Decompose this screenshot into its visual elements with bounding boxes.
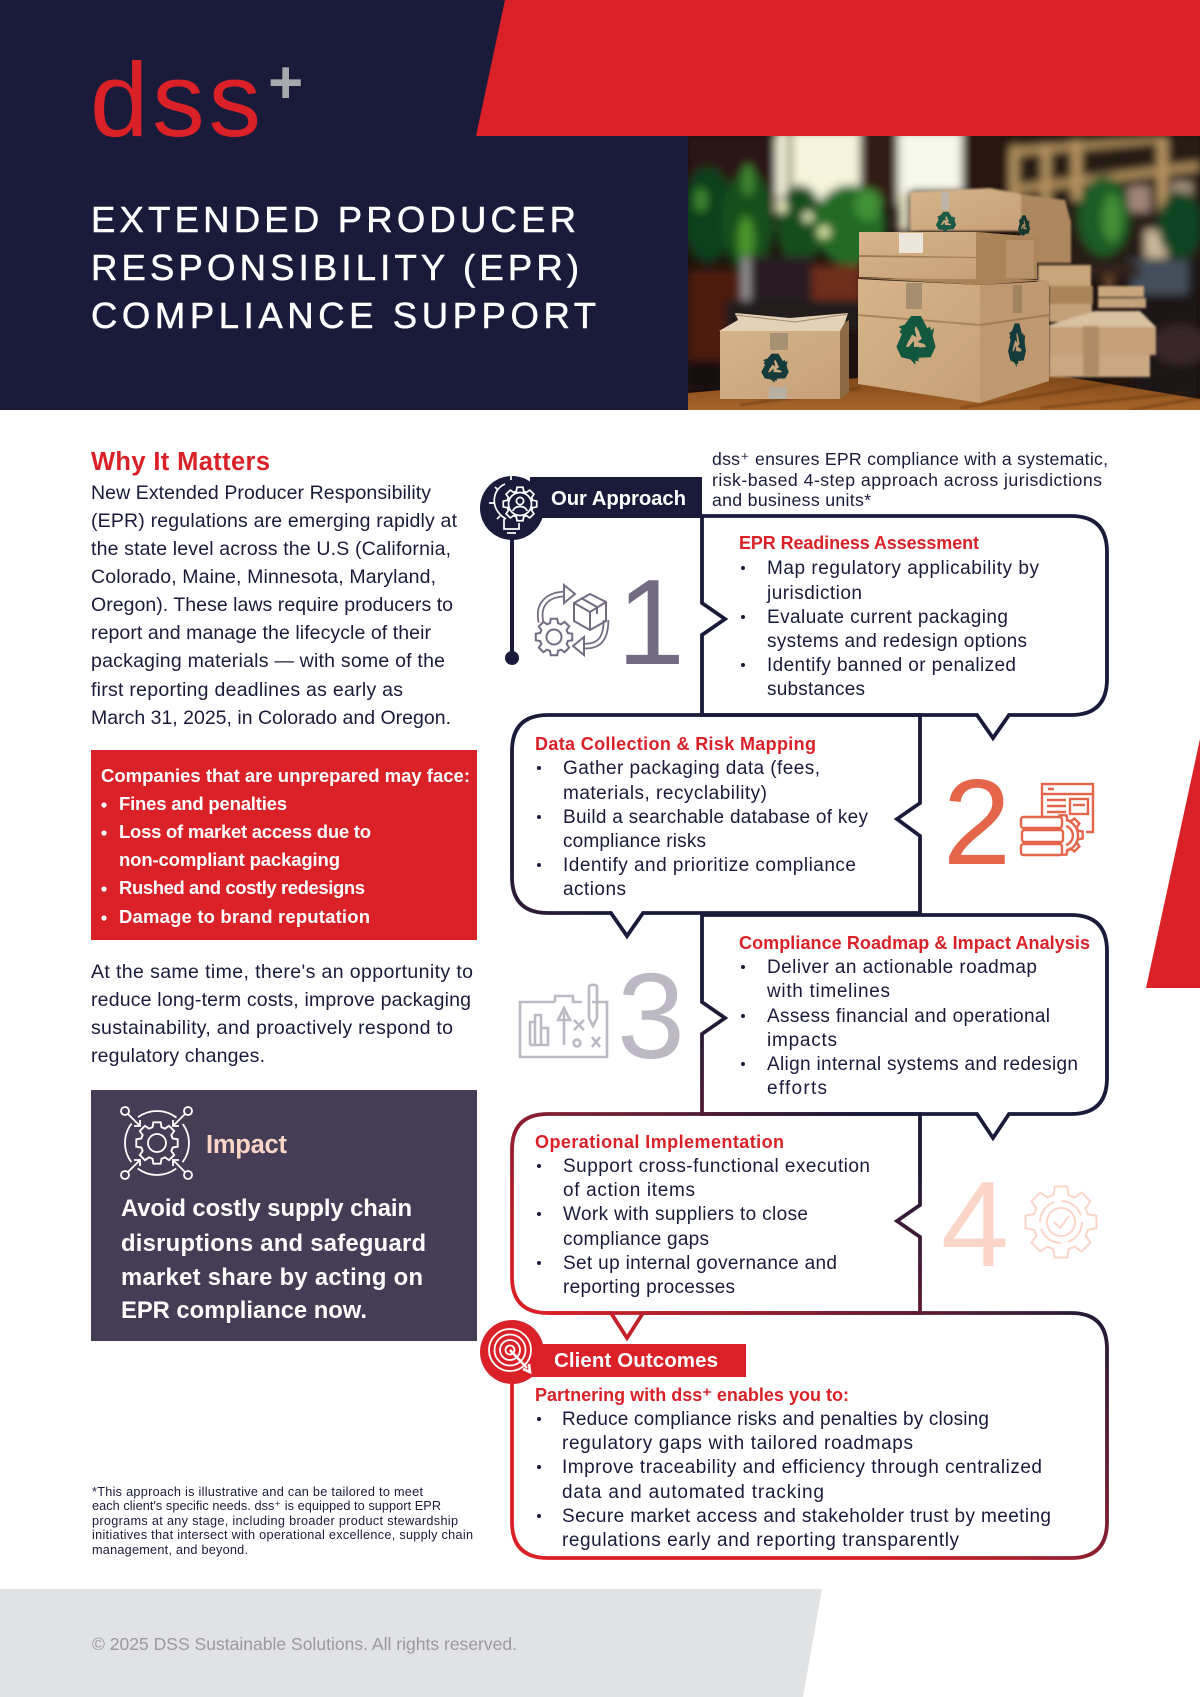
step 4: number and icon: 4 xyxy=(941,1156,1009,1292)
step 2 text: materials, recyclability) xyxy=(563,783,767,804)
step 1 text: Identify banned or penalized xyxy=(767,655,1016,676)
step 4 text: Set up internal governance and xyxy=(563,1253,837,1274)
step 3 text: Assess financial and operational xyxy=(767,1006,1050,1027)
panel: risks for unprepared companies: non-compliant packaging xyxy=(119,849,340,870)
client outcomes text: regulations early and reporting transparently xyxy=(562,1530,960,1551)
intro text: approach: dss⁺ ensures EPR compliance with a systematic, xyxy=(712,449,1108,469)
timeline line with end dot xyxy=(505,535,519,665)
step 2 text: Identify and prioritize compliance xyxy=(563,855,856,876)
step 2: number and icon xyxy=(943,754,1093,890)
step 3 bubble outline xyxy=(702,915,1107,1138)
step 1 text: jurisdiction xyxy=(766,583,862,604)
text block: why it matters body: (EPR) regulations are emerging rapidly at xyxy=(91,510,458,532)
step 2 bubble outline xyxy=(512,715,920,936)
footer band xyxy=(0,1589,822,1697)
text block: opportunity: reduce long-term costs, improve packaging xyxy=(91,989,471,1011)
icon: gear with check mark xyxy=(1026,1187,1096,1257)
title: COMPLIANCE SUPPORT xyxy=(91,295,596,336)
step 4 text: reporting processes xyxy=(563,1277,735,1298)
panel: impact: Avoid costly supply chain xyxy=(121,1195,412,1222)
panel: impact: market share by acting on xyxy=(121,1264,423,1291)
text block: opportunity xyxy=(91,961,473,1067)
footer copyright: © 2025 DSS Sustainable Solutions. All rights reserved. xyxy=(92,1634,517,1654)
client outcomes text: Secure market access and stakeholder trust by meeting xyxy=(562,1506,1051,1527)
step 4 text: Support cross-functional execution xyxy=(563,1156,870,1177)
step 3 text: Deliver an actionable roadmap xyxy=(767,957,1037,978)
client outcomes text xyxy=(535,1385,1051,1551)
badge: client outcomes: Client Outcomes xyxy=(554,1349,718,1372)
client outcomes text: regulatory gaps with tailored roadmaps xyxy=(562,1433,913,1454)
middle box xyxy=(859,232,1037,281)
step 1: icon and number xyxy=(536,554,685,690)
step 2 text xyxy=(535,734,868,900)
logo: dss+: + xyxy=(267,49,302,116)
text block: why it matters body: packaging materials — with some of the xyxy=(91,650,445,672)
panel: risks for unprepared companies: Fines and penalties xyxy=(119,793,287,814)
footnote: initiatives that intersect with operational excellence, supply chain xyxy=(92,1528,473,1542)
text block: why it matters body: New Extended Producer Responsibility xyxy=(91,482,431,504)
icon: strategy board with pencil xyxy=(520,985,607,1057)
step 4 text: Operational Implementation xyxy=(535,1132,784,1152)
panel: risks for unprepared companies: Companies that are unprepared may face: xyxy=(101,765,470,786)
text block: why it matters body: Oregon). These laws require producers to xyxy=(91,594,453,616)
footnote xyxy=(92,1485,473,1557)
panel: risks for unprepared companies: Loss of market access due to xyxy=(119,821,371,842)
step 1 text: Evaluate current packaging xyxy=(767,607,1008,628)
text block: why it matters body: Colorado, Maine, Minnesota, Maryland, xyxy=(91,566,436,588)
title xyxy=(91,199,596,336)
right stacked boxes xyxy=(910,188,1156,377)
text block: opportunity: At the same time, there's an opportunity to xyxy=(91,961,473,983)
intro text: approach xyxy=(712,449,1108,510)
panel: risks for unprepared companies xyxy=(91,750,477,940)
logo: dss+: dss xyxy=(90,42,261,159)
title: EXTENDED PRODUCER xyxy=(91,199,576,240)
step 3 text: efforts xyxy=(767,1078,827,1099)
step 1: icon and number: 1 xyxy=(617,554,685,690)
step 1 text: systems and redesign options xyxy=(767,631,1027,652)
step 5 bubble: client outcomes outline xyxy=(512,1313,1107,1558)
text block: opportunity: sustainability, and proactively respond to xyxy=(91,1017,453,1039)
step 4 text: compliance gaps xyxy=(563,1229,709,1250)
text block: why it matters body: March 31, 2025, in Colorado and Oregon. xyxy=(91,707,451,729)
heading: why it matters: Why It Matters xyxy=(91,448,270,476)
small box xyxy=(720,325,840,399)
step 2: number and icon: 2 xyxy=(943,754,1011,890)
seating xyxy=(688,270,743,365)
icon: gear with converging arrows xyxy=(121,1107,192,1179)
text block: why it matters body: first reporting deadlines as early as xyxy=(91,679,403,701)
step 3: icon and number: 3 xyxy=(617,948,685,1084)
client outcomes text: data and automated tracking xyxy=(562,1482,824,1503)
step 1 bubble outline xyxy=(702,516,1107,738)
text block: why it matters body xyxy=(91,482,458,729)
step 1 text xyxy=(739,533,1040,700)
footnote: each client's specific needs. dss⁺ is equipped to support EPR xyxy=(92,1499,441,1513)
header: red angled band xyxy=(476,0,1200,136)
icon: box, gear and cycle arrows xyxy=(536,585,606,655)
panel: impact xyxy=(91,1090,477,1341)
client outcomes text: Improve traceability and efficiency through centralized xyxy=(562,1457,1042,1478)
intro text: approach: risk-based 4-step approach across jurisdictions xyxy=(712,470,1102,490)
header: navy banner xyxy=(0,0,1200,410)
intro text: approach: and business units* xyxy=(712,490,871,510)
photo: stacked recycled cardboard boxes xyxy=(682,130,1200,410)
text block: why it matters body: the state level across the U.S (California, xyxy=(91,538,451,560)
client outcomes text: Partnering with dss⁺ enables you to: xyxy=(535,1385,849,1405)
step 2 text: Data Collection & Risk Mapping xyxy=(535,734,816,754)
step 1 text: EPR Readiness Assessment xyxy=(739,533,979,553)
step 4 bubble outline xyxy=(512,1114,920,1338)
panel: risks for unprepared companies: Rushed and costly redesigns xyxy=(119,877,365,898)
step 2 text: compliance risks xyxy=(563,831,706,852)
step 4 text: Work with suppliers to close xyxy=(563,1204,808,1225)
icon: lightbulb with gear and person xyxy=(489,476,537,533)
step 2 text: Build a searchable database of key xyxy=(563,807,868,828)
footnote: *This approach is illustrative and can be tailored to meet xyxy=(92,1485,423,1499)
panel: impact: disruptions and safeguard xyxy=(121,1230,426,1257)
step 1 text: substances xyxy=(767,679,865,700)
top back box details xyxy=(936,212,956,232)
step 4 text xyxy=(535,1132,870,1298)
step 3 text: with timelines xyxy=(766,981,890,1002)
panel: impact: Impact xyxy=(206,1131,288,1159)
step 3 text: impacts xyxy=(767,1030,837,1051)
footnote: management, and beyond. xyxy=(92,1543,248,1557)
badge: our approach: Our Approach xyxy=(551,488,686,510)
badge: client outcomes xyxy=(480,1320,746,1384)
text block: why it matters body: report and manage the lifecycle of their xyxy=(91,622,432,644)
step 3 text: Compliance Roadmap & Impact Analysis xyxy=(739,933,1090,953)
step 1 text: Map regulatory applicability by xyxy=(767,558,1040,579)
right plants xyxy=(1078,176,1130,256)
step 3: icon and number xyxy=(520,948,685,1084)
panel: risks for unprepared companies: Damage to brand reputation xyxy=(119,906,370,927)
step 4: number and icon xyxy=(941,1156,1096,1292)
icon: database and web document xyxy=(1021,784,1093,855)
step 2 text: actions xyxy=(563,879,626,900)
wood table xyxy=(688,374,1200,410)
client outcomes text: Reduce compliance risks and penalties by closing xyxy=(562,1409,989,1430)
badge: our approach xyxy=(480,476,702,540)
step 2 text: Gather packaging data (fees, xyxy=(563,758,820,779)
big box xyxy=(858,279,980,403)
left plants xyxy=(682,167,734,263)
text block: opportunity: regulatory changes. xyxy=(91,1045,265,1067)
title: RESPONSIBILITY (EPR) xyxy=(91,247,579,288)
step 3 text xyxy=(739,933,1090,1099)
step 4 text: of action items xyxy=(563,1180,695,1201)
panel: impact: EPR compliance now. xyxy=(121,1297,367,1324)
icon: target with arrow xyxy=(489,1329,531,1372)
footnote: programs at any stage, including broader product stewardship xyxy=(92,1514,458,1528)
right edge red accent xyxy=(1146,739,1200,988)
step 3 text: Align internal systems and redesign xyxy=(767,1054,1078,1075)
